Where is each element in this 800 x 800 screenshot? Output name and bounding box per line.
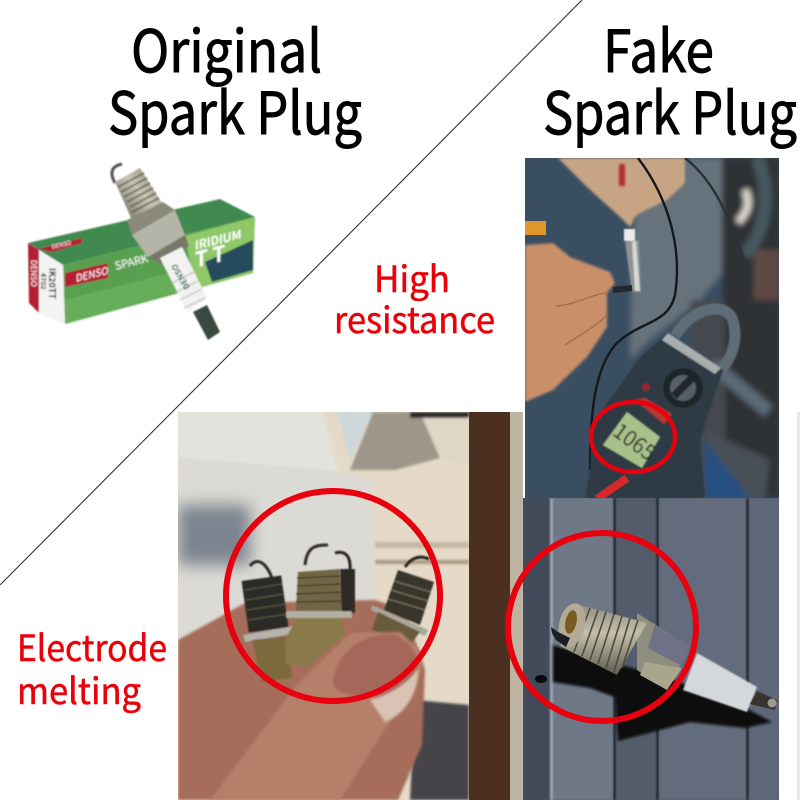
label: Electrode melting xyxy=(17,620,167,715)
fake plug: threaded shell xyxy=(560,605,647,675)
left spark plug xyxy=(242,562,295,682)
title: Original Spark Plug xyxy=(108,5,362,151)
title: Fake Spark Plug: Fake xyxy=(603,5,714,89)
meter reading: 1065 xyxy=(607,414,663,467)
box: end face xyxy=(39,250,65,324)
photo: original Denso spark plug and box: DENSO xyxy=(169,262,193,291)
photo: fake spark plug being tested with clamp meter xyxy=(525,158,780,499)
box: labels: 4702 xyxy=(38,273,48,290)
fake plug: hex body xyxy=(637,613,690,690)
photo: fake spark plug with melted electrode on dark panel xyxy=(523,498,779,800)
middle spark plug xyxy=(285,545,352,665)
title: Fake Spark Plug xyxy=(543,5,797,151)
box: labels: DENSO xyxy=(50,238,72,251)
photo: melted electrodes held in hand xyxy=(178,412,469,800)
thumb xyxy=(210,632,422,800)
cast shadow xyxy=(553,645,772,741)
melted electrode xyxy=(551,627,570,647)
box: labels xyxy=(28,225,244,299)
panel ridges xyxy=(523,498,779,800)
label: High resistance: resistance xyxy=(334,292,495,344)
label: High resistance: High xyxy=(374,251,450,303)
warning sticker xyxy=(525,221,546,235)
spark plug: threads xyxy=(115,168,162,220)
photo: brown door frame strip xyxy=(469,412,800,800)
fake plug: terminal xyxy=(750,691,777,710)
box: top face xyxy=(28,199,255,265)
fake spark plug under test xyxy=(624,229,641,292)
fake plug: firing end xyxy=(558,603,586,646)
spark plug: dark terminal xyxy=(193,305,220,340)
box: labels: DENSO xyxy=(73,262,111,285)
box: front face xyxy=(63,217,255,324)
label: Electrode melting: Electrode xyxy=(17,620,167,672)
meter display xyxy=(603,412,660,468)
engine background xyxy=(630,158,780,498)
hand holding probe xyxy=(525,243,615,402)
photo: original Denso spark plug and box xyxy=(28,164,255,340)
clamp meter xyxy=(585,309,735,498)
back of hand xyxy=(178,600,425,800)
diagonal divider line xyxy=(0,0,582,585)
label: Electrode melting: melting xyxy=(17,663,141,715)
box: labels: IK20TT xyxy=(46,268,59,299)
box: labels: IRIDIUM xyxy=(192,225,244,254)
right spark plug xyxy=(371,557,434,645)
test cable xyxy=(590,158,677,470)
wall background xyxy=(178,412,469,800)
callout circle: meter reading xyxy=(591,402,675,472)
spark plug: collar and hex body xyxy=(127,202,175,235)
box: labels: SPARK xyxy=(113,250,151,274)
callout circle: melted fake plug xyxy=(508,533,696,721)
box: labels: T T xyxy=(189,237,231,275)
fake plug: white ceramic xyxy=(683,653,757,712)
title: Original Spark Plug: Spark Plug xyxy=(108,67,362,151)
spark plug: electrode xyxy=(112,164,122,183)
title: Original Spark Plug: Original xyxy=(131,5,322,89)
back spark plug xyxy=(335,552,355,613)
red test lead xyxy=(597,478,627,499)
callout circle: melted electrodes xyxy=(226,491,440,701)
hand holding spark plug xyxy=(558,158,685,227)
spark plug: white ceramic xyxy=(160,247,207,313)
label: High resistance xyxy=(334,251,495,344)
box: labels: DENSO xyxy=(28,260,39,287)
